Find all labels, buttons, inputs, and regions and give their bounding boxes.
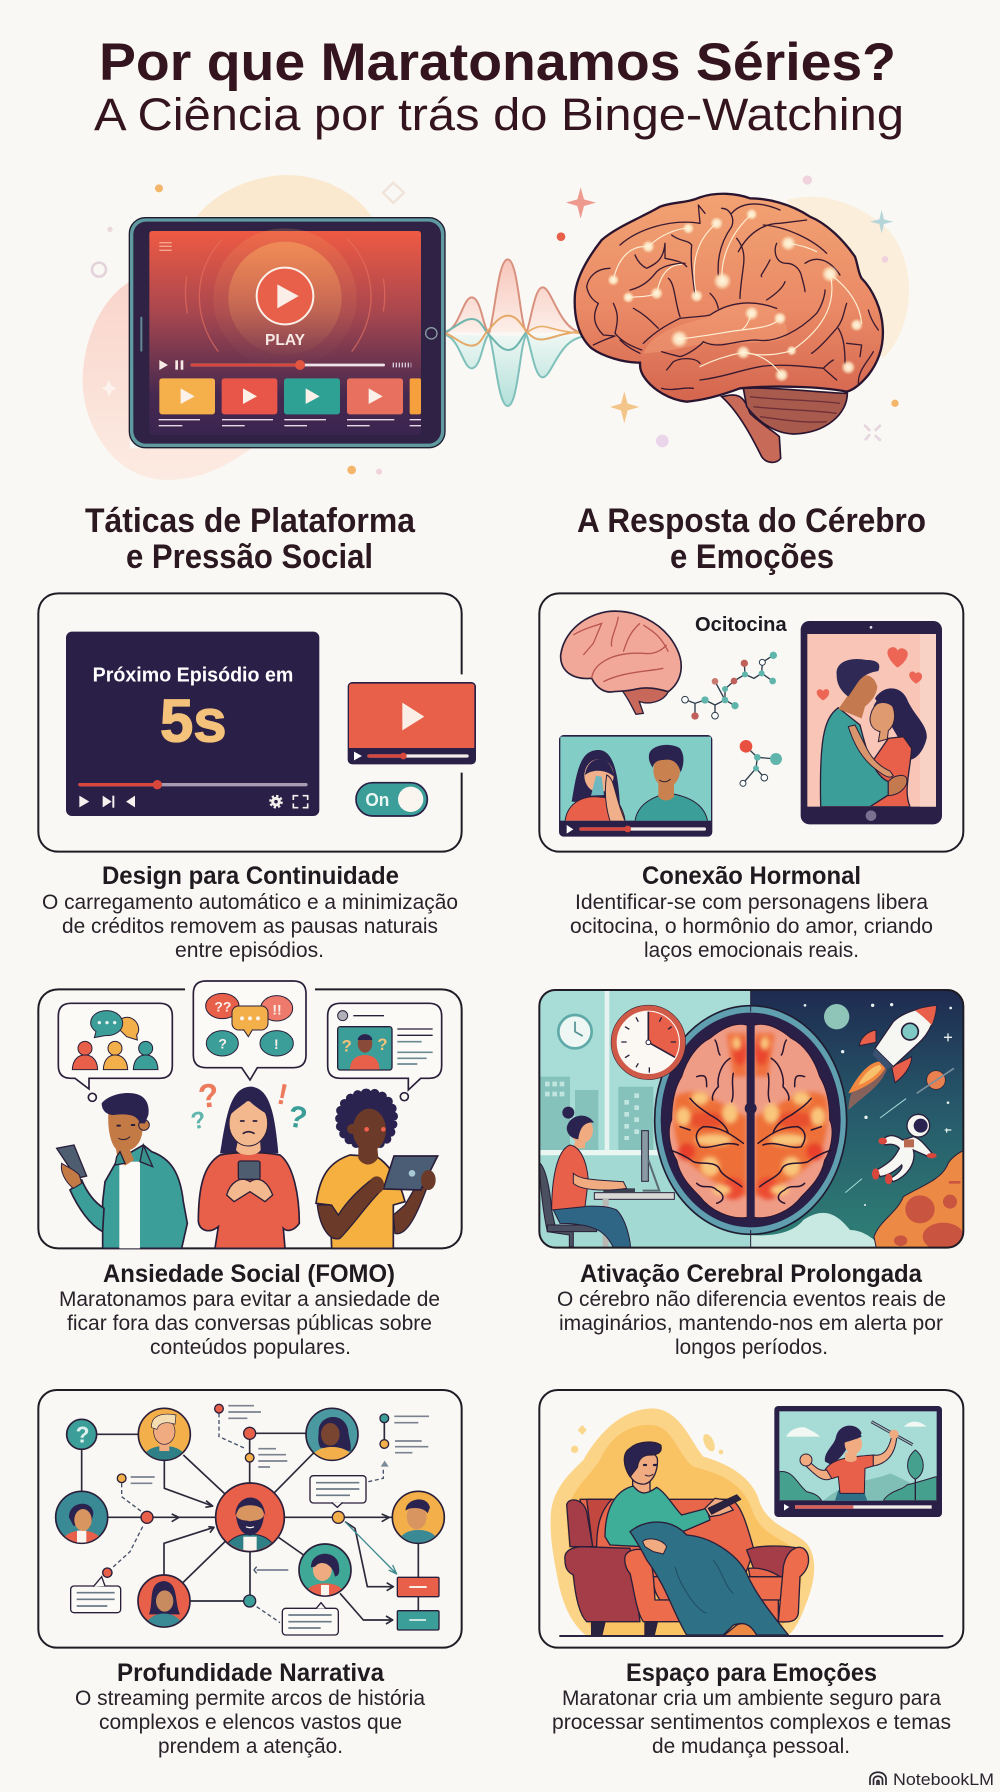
thought bubble: social post: ? bbox=[377, 1035, 388, 1054]
heading: left column bbox=[85, 502, 416, 576]
man on sofa bbox=[605, 1442, 741, 1547]
thought bubble: group chat bbox=[58, 1003, 172, 1101]
caption: espaço para emoções: Espaço para Emoções bbox=[626, 1659, 877, 1687]
caption: ansiedade social: conteúdos populares. bbox=[150, 1336, 351, 1359]
question node: ? bbox=[76, 1422, 90, 1448]
caption: conexão hormonal: ocitocina, o hormônio do amor, criando bbox=[570, 915, 933, 938]
thought bubble: social post: ? bbox=[342, 1037, 352, 1056]
small molecule bbox=[740, 740, 782, 786]
person: worried woman bbox=[198, 1087, 299, 1248]
blanket bbox=[630, 1522, 788, 1636]
next episode player: 5s bbox=[160, 688, 227, 755]
floating question marks: ? bbox=[189, 1106, 208, 1135]
tablet bbox=[129, 218, 445, 448]
hero illustration: tablet and sound wave bbox=[83, 175, 583, 480]
speech bubble: questions: ! bbox=[274, 1036, 279, 1052]
caption: conexão hormonal: Identificar-se com personagens libera bbox=[575, 891, 928, 914]
panel: narrative depth network bbox=[38, 1390, 462, 1648]
woman at desk bbox=[539, 1107, 674, 1248]
panel: autoplay design bbox=[38, 593, 476, 852]
heading: right column: e Emoções bbox=[670, 538, 834, 576]
question node bbox=[67, 1419, 97, 1449]
panel: space for emotions bbox=[539, 1390, 963, 1648]
autoplay toggle bbox=[356, 783, 427, 816]
caption: ansiedade social: ficar fora das conversas públicas sobre bbox=[67, 1312, 432, 1335]
video with crying viewer bbox=[559, 735, 712, 837]
hero illustration: glowing brain bbox=[566, 175, 909, 462]
caption: espaço para emoções bbox=[552, 1659, 951, 1758]
caption: conexão hormonal bbox=[570, 862, 933, 962]
caption: design para continuidade: O carregamento automático e a minimização bbox=[42, 891, 458, 914]
footer logo: NotebookLM: NotebookLM bbox=[893, 1770, 994, 1789]
caption: ativação cerebral prolongada: imaginários, mantendo-nos em alerta por bbox=[559, 1312, 943, 1335]
caption: ativação cerebral prolongada: longos períodos. bbox=[675, 1336, 828, 1359]
brain scan bbox=[655, 1006, 847, 1234]
speech bubble: questions bbox=[193, 981, 306, 1080]
autoplay toggle: On bbox=[365, 789, 389, 810]
neural pathways bbox=[607, 208, 863, 382]
avatar: woman left bbox=[56, 1491, 108, 1544]
title bbox=[94, 33, 904, 140]
decorative blobs and dots bbox=[83, 175, 565, 480]
caption: ansiedade social: Maratonamos para evitar a ansiedade de bbox=[59, 1288, 440, 1311]
caption: ansiedade social: Ansiedade Social (FOMO) bbox=[103, 1260, 395, 1288]
mini player bbox=[348, 682, 476, 764]
panel: social anxiety bbox=[38, 981, 462, 1248]
avatar: woman with dark hair bbox=[306, 1408, 358, 1461]
ringed planet bbox=[917, 1068, 954, 1093]
floor line bbox=[559, 1633, 943, 1639]
annotation lines bbox=[131, 1406, 429, 1483]
sound wave bbox=[446, 259, 583, 406]
large wall clock bbox=[611, 1005, 685, 1079]
avatar: central bearded man bbox=[216, 1483, 284, 1553]
brain cortex bbox=[575, 194, 883, 402]
caption: profundidade narrativa bbox=[75, 1659, 425, 1758]
caption: conexão hormonal: laços emocionais reais. bbox=[644, 939, 859, 962]
title: Por que Maratonamos Séries? bbox=[99, 33, 896, 92]
caption: ativação cerebral prolongada: Ativação Cerebral Prolongada bbox=[580, 1260, 923, 1288]
caption: design para continuidade: Design para Continuidade bbox=[102, 862, 399, 890]
caption: ativação cerebral prolongada: O cérebro não diferencia eventos reais de bbox=[557, 1288, 946, 1311]
warm glow bbox=[551, 1408, 814, 1636]
avatar: woman bottom left bbox=[138, 1575, 190, 1628]
floating question marks: ? bbox=[285, 1099, 310, 1136]
caption: profundidade narrativa: prendem a atenção. bbox=[158, 1735, 343, 1758]
note boxes bbox=[71, 1476, 366, 1635]
label: ocitocina: Ocitocina bbox=[695, 614, 788, 636]
astronaut bbox=[872, 1114, 937, 1184]
brain background and sparkles bbox=[566, 175, 909, 447]
television bbox=[774, 1406, 942, 1517]
person: man with phone bbox=[57, 1093, 187, 1248]
heading: left column: Táticas de Plataforma bbox=[85, 502, 416, 540]
caption: profundidade narrativa: Profundidade Narrativa bbox=[117, 1659, 385, 1687]
small brain bbox=[561, 611, 681, 714]
avatar: woman lower right bbox=[299, 1544, 351, 1597]
next episode player: Próximo Episódio em bbox=[93, 665, 293, 687]
heading: right column bbox=[577, 502, 926, 576]
person: man with tablet bbox=[316, 1093, 438, 1248]
speech bubble: questions: ?? bbox=[214, 999, 231, 1015]
caption: ansiedade social bbox=[59, 1260, 440, 1359]
office half bbox=[539, 990, 751, 1249]
caption: profundidade narrativa: complexos e elencos vastos que bbox=[99, 1711, 402, 1734]
dashed connectors bbox=[112, 1413, 383, 1623]
small nodes bbox=[103, 1404, 389, 1607]
sofa bbox=[565, 1499, 809, 1636]
rocket bbox=[848, 1006, 936, 1110]
panel: hormonal connection bbox=[539, 593, 963, 852]
caption: espaço para emoções: processar sentimentos complexos e temas bbox=[552, 1711, 951, 1734]
caption: ativação cerebral prolongada bbox=[557, 1260, 946, 1359]
avatar: blond man bbox=[138, 1408, 190, 1461]
next episode player bbox=[66, 632, 319, 816]
floating question marks: ! bbox=[274, 1078, 291, 1112]
caption: espaço para emoções: de mudança pessoal. bbox=[652, 1735, 850, 1758]
avatar: man right bbox=[392, 1491, 444, 1544]
thought bubble: social post bbox=[328, 1003, 442, 1101]
panel: prolonged brain activation bbox=[539, 990, 967, 1251]
tablet: PLAY bbox=[265, 332, 305, 349]
caption: design para continuidade: entre episódios. bbox=[175, 939, 324, 962]
heading: left column: e Pressão Social bbox=[126, 538, 373, 576]
caption: profundidade narrativa: O streaming permite arcos de história bbox=[75, 1687, 425, 1710]
caption: design para continuidade bbox=[42, 862, 458, 962]
caption: espaço para emoções: Maratonar cria um ambiente seguro para bbox=[562, 1687, 941, 1710]
oxytocin molecule bbox=[682, 652, 777, 720]
brain stem and cerebellum bbox=[722, 388, 847, 462]
speech bubble: questions: !! bbox=[272, 1001, 282, 1017]
tablet with embracing couple bbox=[801, 621, 942, 824]
title: A Ciência por trás do Binge-Watching bbox=[94, 89, 904, 140]
heading: right column: A Resposta do Cérebro bbox=[577, 502, 926, 540]
caption: conexão hormonal: Conexão Hormonal bbox=[642, 862, 861, 890]
floating question marks bbox=[189, 1077, 310, 1136]
floating question marks: ? bbox=[196, 1077, 221, 1116]
network links bbox=[82, 1418, 418, 1624]
caption: design para continuidade: de créditos removem as pausas naturais bbox=[62, 915, 438, 938]
outcome boxes bbox=[397, 1577, 439, 1630]
speech bubble: questions: ? bbox=[218, 1035, 227, 1051]
space half bbox=[751, 990, 967, 1251]
divider line bbox=[750, 991, 752, 1247]
